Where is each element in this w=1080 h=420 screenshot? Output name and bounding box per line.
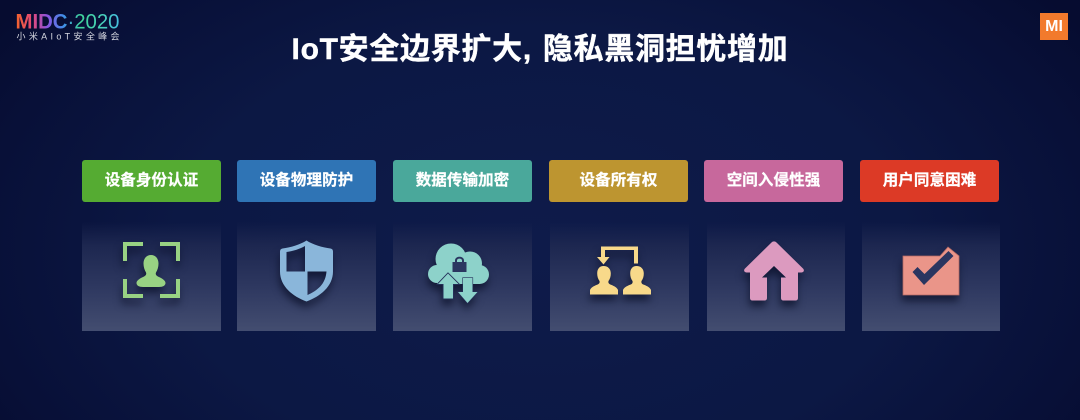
column: device identity authentication <box>82 160 221 331</box>
column: device physical protection <box>237 160 376 331</box>
label: difficult user consent: 用户同意困难 <box>883 172 976 189</box>
logo: MIDC 2020: 小米AIoT安全峰会 <box>16 30 120 42</box>
label: difficult user consent <box>860 160 999 202</box>
image panel <box>550 222 689 331</box>
logo: Mi: MI <box>1045 18 1063 35</box>
image panel <box>393 222 532 331</box>
label: device identity authentication <box>82 160 221 202</box>
image panel <box>707 222 845 331</box>
image panel <box>862 222 1000 331</box>
label: device identity authentication: 设备身份认证 <box>105 172 198 189</box>
label: device physical protection: 设备物理防护 <box>260 172 353 189</box>
column: data transmission encryption <box>393 160 532 331</box>
icon: checked box <box>898 246 962 305</box>
icon: two users with transfer arrow <box>587 246 652 304</box>
logo: Mi <box>1040 13 1068 40</box>
icon: house <box>742 241 804 310</box>
label: device ownership <box>549 160 688 202</box>
column: strong spatial intrusion <box>704 160 845 331</box>
icon: cloud lock with arrows <box>424 244 490 310</box>
label: data transmission encryption: 数据传输加密 <box>416 172 509 189</box>
label: strong spatial intrusion: 空间入侵性强 <box>727 172 820 189</box>
icon: face scan frame <box>119 242 182 307</box>
image panel <box>82 222 221 331</box>
label: strong spatial intrusion <box>704 160 843 202</box>
column: difficult user consent <box>860 160 1000 331</box>
column: device ownership <box>549 160 689 331</box>
label: data transmission encryption <box>393 160 532 202</box>
label: device ownership: 设备所有权 <box>579 172 658 189</box>
label: device physical protection <box>237 160 376 202</box>
icon: shield <box>276 240 335 310</box>
title: IoT安全边界扩大 隐私黑洞担忧增加 <box>292 33 788 66</box>
logo: MIDC 2020: MIDC·2020 <box>16 10 120 34</box>
image panel <box>237 222 376 331</box>
title: , <box>523 33 532 66</box>
